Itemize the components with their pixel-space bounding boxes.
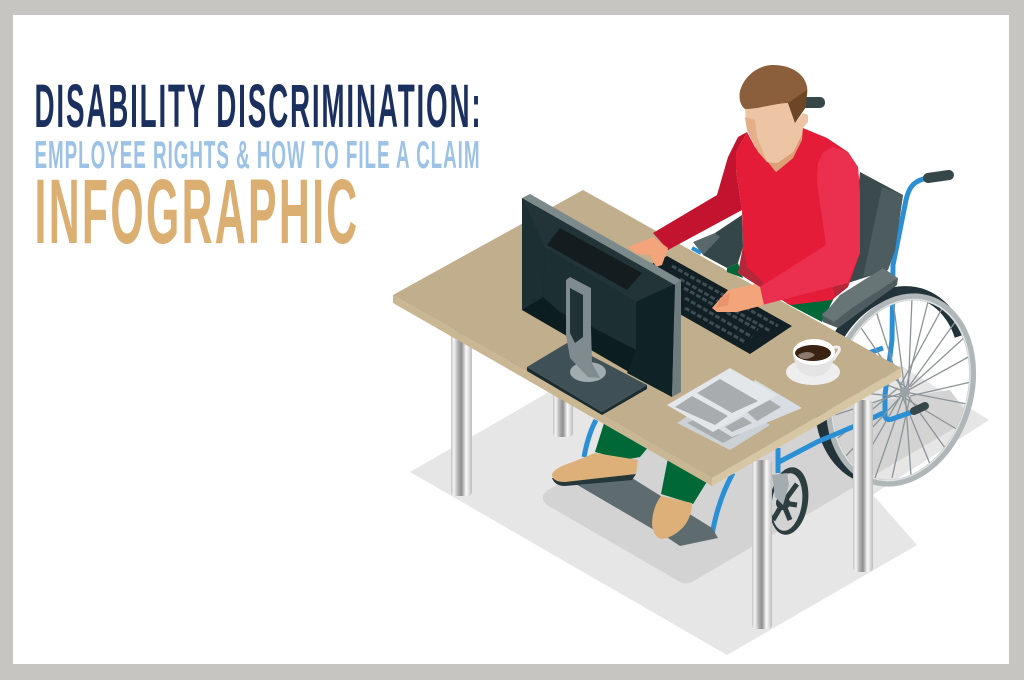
middle sheet text (725, 400, 781, 432)
keys (672, 266, 778, 342)
middle sheet (717, 380, 802, 437)
cup handle (832, 347, 839, 360)
leg: front left (451, 330, 472, 496)
left sleeve (653, 132, 747, 250)
infographic canvas: EMPLOYEE RIGHTS & HOW TO FILE A CLAIM (34, 134, 480, 177)
push handle (928, 175, 949, 178)
cup rim (793, 339, 835, 365)
cream (798, 352, 815, 359)
shoe sole: left (552, 474, 636, 486)
blue tube fragment (692, 248, 701, 253)
top bezel (522, 194, 681, 285)
caster spokes (773, 484, 797, 520)
top facet (522, 198, 675, 302)
shoe: left (552, 453, 638, 482)
base top (527, 343, 647, 412)
spokes (835, 298, 972, 478)
keyboard (650, 256, 792, 354)
bottom sheet (677, 395, 770, 450)
monitor back (522, 198, 675, 397)
armrest top (822, 268, 898, 322)
floor shadows (410, 365, 989, 655)
hub (900, 387, 910, 397)
left facet (522, 198, 545, 310)
green trouser: left leg (595, 420, 650, 460)
blue front tubes (584, 420, 778, 535)
sweater band: right (833, 277, 848, 297)
caster inner (768, 471, 806, 533)
right hand finger shadow (716, 293, 730, 308)
saucer (786, 359, 840, 385)
face shadow (745, 117, 767, 162)
backrest (848, 172, 903, 283)
green trousers on seat (786, 296, 835, 322)
text block lower (725, 417, 752, 432)
stand slot (570, 288, 583, 343)
monitor base (527, 343, 647, 415)
title block: INFOGRAPHIC (34, 161, 360, 263)
cup body (793, 352, 835, 376)
top sheet (667, 368, 777, 432)
right sleeve (760, 147, 860, 305)
floor: dark chair shadow (543, 390, 966, 584)
stand foot (570, 362, 606, 382)
coffee cup (786, 339, 840, 385)
big wheel (807, 279, 995, 501)
leg: right (853, 400, 873, 572)
desk top (393, 190, 901, 478)
person torso (653, 65, 860, 322)
floor: wheelchair shadow (831, 365, 989, 512)
sweater band: left (738, 247, 764, 287)
footplate (574, 478, 718, 546)
text column left (675, 396, 728, 425)
right facet (627, 284, 675, 397)
blue backrest tube (885, 178, 928, 416)
text block upper (747, 400, 781, 421)
text column right (697, 379, 758, 413)
hair shadow (788, 90, 807, 123)
backrest light side (863, 187, 903, 277)
left hand (628, 237, 668, 267)
desk right edge (712, 368, 901, 486)
centre facet (543, 248, 636, 350)
left seat side (703, 215, 743, 268)
coffee (795, 345, 831, 361)
tire (820, 292, 960, 479)
armrest (822, 268, 898, 328)
neck shadow (768, 128, 803, 172)
floor: desk shadow (410, 380, 917, 655)
right bezel (672, 280, 681, 397)
stand (566, 277, 600, 378)
vent (547, 228, 642, 290)
green trousers near seat (727, 263, 743, 278)
base edge (527, 367, 647, 415)
bottom sheet text (687, 415, 740, 443)
caster tire (765, 465, 813, 537)
hair (740, 65, 807, 123)
armrest side (822, 278, 898, 328)
left arm piece (693, 233, 720, 255)
top sheet text (675, 379, 758, 425)
leg: front (752, 460, 772, 629)
keyboard body (650, 256, 792, 354)
desk legs (451, 330, 873, 629)
caster wheel (765, 465, 813, 537)
head rest (800, 97, 825, 108)
rim highlight (810, 282, 992, 498)
desk (393, 190, 901, 486)
face (745, 103, 808, 163)
shoe: right (652, 496, 692, 539)
caster hub (776, 496, 790, 510)
monitor (522, 194, 681, 397)
infographic canvas: DISABILITY DISCRIMINATION: (34, 72, 482, 140)
hands (628, 237, 764, 312)
sweater body (736, 128, 860, 305)
caster fork (772, 473, 789, 505)
title block (34, 72, 482, 263)
rim (807, 279, 995, 501)
wheelchair (574, 172, 995, 546)
frame grip (914, 406, 925, 411)
papers (667, 368, 802, 450)
green trouser: right leg (661, 458, 708, 504)
legs and shoes under desk (552, 420, 708, 539)
rear blue tube (863, 348, 883, 355)
desk rear leg (553, 380, 573, 437)
lower blue frame (777, 412, 912, 463)
right hand (712, 284, 764, 312)
desk left edge (393, 295, 712, 486)
